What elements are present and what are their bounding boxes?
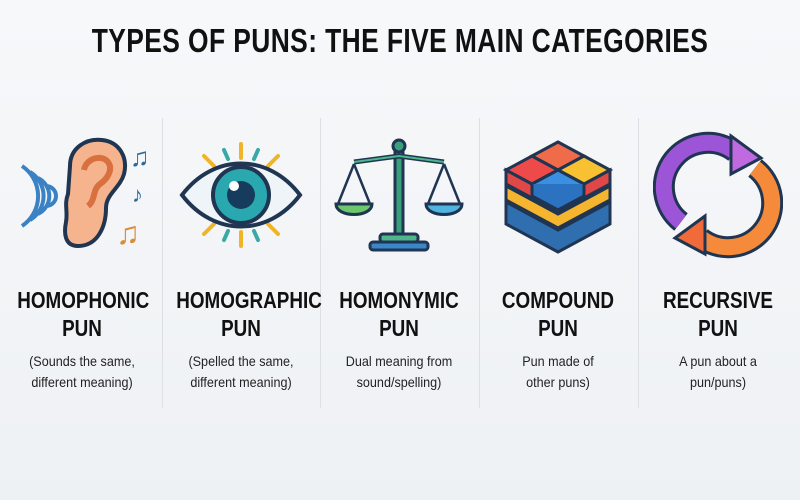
- description: A pun about a: [679, 353, 757, 369]
- heading: PUN: [221, 315, 261, 341]
- heading: [17, 287, 149, 341]
- icon: ear: [20, 138, 150, 251]
- description: (Spelled the same,: [188, 353, 294, 369]
- panel: homographic: [176, 142, 322, 390]
- heading: PUN: [698, 315, 738, 341]
- heading: PUN: [538, 315, 578, 341]
- description: pun/puns): [690, 374, 746, 390]
- description: [522, 353, 594, 390]
- icon: scales: [334, 138, 464, 252]
- heading: PUN: [379, 315, 419, 341]
- description: [346, 353, 452, 390]
- description: [679, 353, 757, 390]
- icon: ear: ♫: [116, 215, 140, 251]
- panel: homophonic: [17, 138, 150, 390]
- icon: eye: [180, 142, 302, 248]
- description: Dual meaning from: [346, 353, 452, 369]
- heading: HOMONYMIC: [339, 287, 459, 313]
- heading: HOMOPHONIC: [17, 287, 149, 313]
- description: different meaning): [31, 374, 133, 390]
- description: different meaning): [190, 374, 292, 390]
- description: other puns): [526, 374, 590, 390]
- heading: COMPOUND: [502, 287, 614, 313]
- panel: compound: [502, 140, 614, 390]
- icon: cycle arrows: [653, 132, 783, 258]
- icon: puzzle stack: [503, 140, 613, 254]
- description: (Sounds the same,: [29, 353, 135, 369]
- heading: [339, 287, 459, 341]
- panel: recursive: [653, 132, 783, 390]
- heading: RECURSIVE: [663, 287, 773, 313]
- description: [29, 353, 135, 390]
- heading: PUN: [62, 315, 102, 341]
- heading: HOMOGRAPHIC: [176, 287, 322, 313]
- heading: [663, 287, 773, 341]
- title: TYPES OF PUNS: THE FIVE MAIN CATEGORIES: [92, 22, 708, 59]
- heading: [502, 287, 614, 341]
- description: Pun made of: [522, 353, 594, 369]
- heading: [176, 287, 322, 341]
- icon: ear: ♫: [130, 142, 150, 172]
- description: [188, 353, 294, 390]
- icon: ear: ♪: [132, 182, 143, 207]
- panel: homonymic: [334, 138, 464, 390]
- description: sound/spelling): [357, 374, 441, 390]
